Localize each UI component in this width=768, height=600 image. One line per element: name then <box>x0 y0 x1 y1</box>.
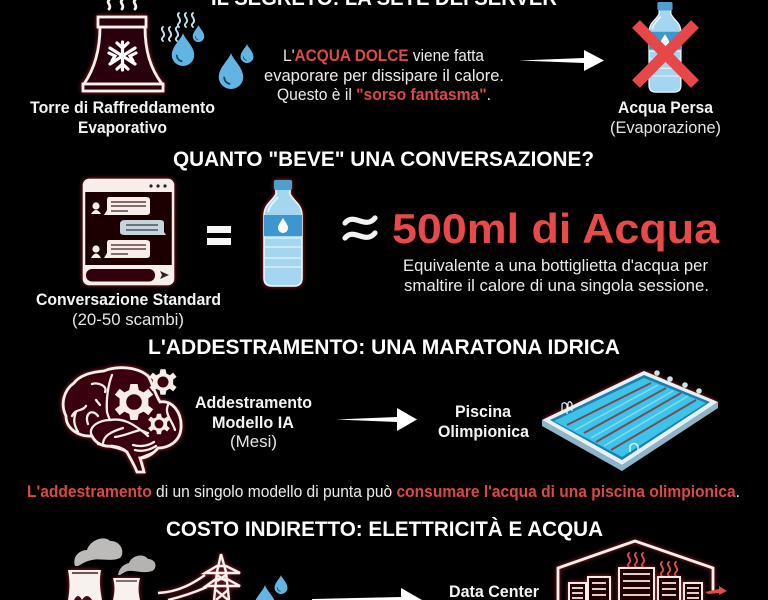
label: standard conversation: (20-50 scambi) <box>72 310 184 329</box>
icon: power plant <box>68 538 155 600</box>
icon: crossed-out bottle <box>636 2 695 92</box>
panel: the secret, server thirst <box>30 0 721 137</box>
icon: transmission pylon <box>158 554 240 600</box>
arrow: to lost water <box>519 50 604 71</box>
text: equivalent explanation: smaltire il calore di una singola sessione. <box>404 277 709 295</box>
icon: data center building <box>558 541 727 600</box>
icon: evaporating water drops <box>162 13 253 89</box>
arrow: to data center <box>312 588 422 600</box>
icon: water drops <box>253 575 287 600</box>
icon: equals sign <box>207 226 231 245</box>
icon: water bottle <box>264 180 302 286</box>
label: AI model training <box>195 393 312 451</box>
label: olympic pool: Piscina <box>455 402 512 421</box>
heading: training: L'ADDESTRAMENTO: UNA MARATONA IDRICA <box>148 336 620 359</box>
label: olympic pool: Olimpionica <box>438 422 530 441</box>
icon: chat window <box>84 180 173 284</box>
icon: olympic swimming pool <box>542 370 718 471</box>
label: AI model training: Modello IA <box>212 413 294 432</box>
label: lost water: Acqua Persa <box>618 98 713 117</box>
heading: conversation: QUANTO "BEVE" UNA CONVERSAZIONE? <box>173 148 594 171</box>
text: sweet water explanation <box>264 47 504 104</box>
value: 500ml of water: 500ml di Acqua <box>392 205 720 252</box>
symbol: approximately <box>345 218 375 238</box>
label: lost water <box>610 98 721 137</box>
label: cooling tower <box>30 98 215 137</box>
label: AI model training: Addestramento <box>195 393 312 412</box>
text: equivalent explanation: Equivalente a una bottiglietta d'acqua per <box>403 257 708 275</box>
text: sweet water explanation: evaporare per dissipare il calore. <box>264 67 504 85</box>
label: standard conversation: Conversazione Standard <box>36 290 221 309</box>
icon: brain with gears <box>63 368 181 472</box>
arrow: to pool <box>336 408 417 431</box>
text: sweet water explanation: Questo è il "sorso fantasma". <box>277 86 491 104</box>
text: sweet water explanation: L'ACQUA DOLCE viene fatta <box>283 47 485 65</box>
panel: training, a water marathon <box>27 336 740 501</box>
panel: how much a conversation drinks <box>36 148 720 329</box>
text: equivalent explanation <box>403 257 709 295</box>
icon: evaporative cooling tower <box>83 0 163 91</box>
label: AI model training: (Mesi) <box>230 432 277 451</box>
panel: indirect cost, electricity and water <box>68 518 727 600</box>
label: lost water: (Evaporazione) <box>610 118 721 137</box>
label: standard conversation <box>36 290 221 329</box>
heading: indirect cost: COSTO INDIRETTO: ELETTRICITÀ E ACQUA <box>166 518 603 541</box>
label: cooling tower: Evaporativo <box>78 118 167 137</box>
label: cooling tower: Torre di Raffreddamento <box>30 98 215 117</box>
label: olympic pool <box>438 402 530 441</box>
text: training consumption statement: L'addestramento di un singolo modello di punta può consumare l'acqua di una piscina olimpionica. <box>27 483 740 501</box>
